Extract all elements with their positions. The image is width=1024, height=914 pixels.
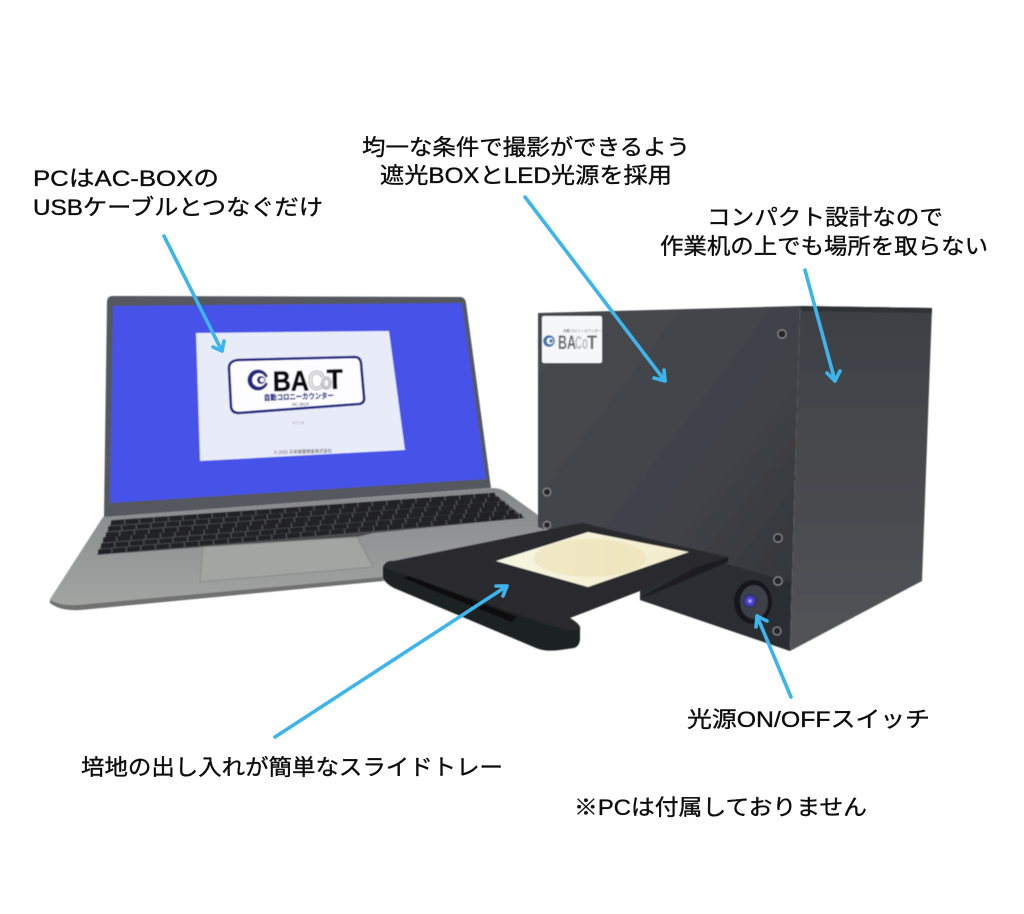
arrow: switch (756, 616, 791, 697)
arrow: slide tray (275, 586, 507, 737)
power switch (734, 580, 772, 624)
device box (538, 306, 932, 651)
label: PC connection: USBケーブルとつなぐだけ (33, 195, 323, 220)
splash screen: C (307, 366, 325, 396)
laptop base (50, 488, 545, 610)
label: lighting: 遮光BOXとLED光源を採用 (380, 163, 672, 188)
label: PC connection (33, 166, 323, 220)
tray top (383, 523, 728, 630)
tray front handle (383, 567, 580, 651)
logo wordmark: BA (272, 365, 309, 397)
arrow: compact design (805, 270, 840, 381)
splash screen (196, 331, 405, 461)
version: 0.7.7.0 (293, 421, 304, 425)
splash screen: o (321, 369, 332, 394)
label: lighting (362, 135, 690, 188)
label: compact design (660, 205, 988, 259)
tray slot (403, 576, 517, 622)
keyboard (97, 493, 525, 555)
slide tray (383, 523, 728, 651)
box label (542, 316, 602, 363)
box front face (538, 306, 800, 651)
logo subtitle: 自動コロニーカウンター (264, 390, 334, 402)
copyright: © 2025 日本細菌検査株式会社 (274, 447, 332, 456)
arrow: light-shielding box (525, 197, 665, 381)
label: slide tray: 培地の出し入れが簡単なスライドトレー (81, 755, 503, 780)
arrow: PC to laptop (164, 236, 224, 351)
label: compact design: コンパクト設計なので (707, 205, 943, 230)
culture medium window (496, 532, 689, 587)
laptop screen (110, 303, 486, 503)
laptop (50, 296, 545, 610)
label: compact design: 作業机の上でも場所を取らない (660, 234, 988, 259)
screws (543, 330, 786, 635)
box right face (790, 306, 932, 651)
label: switch: 光源ON/OFFスイッチ (687, 707, 930, 732)
note: PC not included: ※PCは付属しておりません (574, 795, 867, 820)
model name: AC-BOX (292, 402, 309, 407)
box label: Co (575, 333, 588, 353)
box label: BA (558, 333, 576, 354)
box lower front panel (580, 522, 790, 651)
splash screen: T (326, 364, 343, 395)
box label: T (587, 333, 597, 354)
label: PC connection: PCはAC-BOXの (33, 166, 219, 191)
label: lighting: 均一な条件で撮影ができるよう (362, 135, 690, 160)
laptop lid (104, 296, 491, 517)
box label: 自動コロニーカウンター (563, 328, 602, 333)
trackpad (200, 537, 373, 582)
logo frame (229, 357, 364, 413)
logo icon (248, 370, 270, 390)
